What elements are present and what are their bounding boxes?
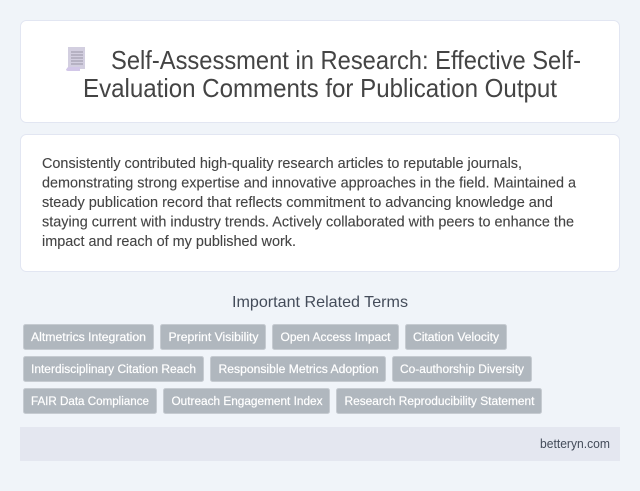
tag	[160, 324, 266, 350]
tag: Outreach Engagement Index	[172, 394, 323, 408]
tag: Citation Velocity	[413, 330, 500, 344]
panel: summary paragraph: impact and reach of my published work.	[42, 233, 296, 250]
tag: Preprint Visibility	[168, 330, 259, 344]
tag: FAIR Data Compliance	[31, 394, 149, 408]
tag	[164, 388, 330, 414]
footer bar	[20, 427, 620, 461]
tag: Open Access Impact	[280, 330, 391, 344]
icon: paper scroll	[66, 47, 85, 71]
panel: summary paragraph: steady publication record that reflects commitment to advancing knowledge and	[42, 194, 553, 211]
tag: Responsible Metrics Adoption	[218, 362, 379, 376]
tag	[210, 356, 386, 382]
tag group	[24, 324, 542, 414]
title text: Self-Assessment in Research: Effective Self-	[111, 47, 581, 75]
title text: Evaluation Comments for Publication Output	[83, 75, 557, 103]
heading: related terms: Important Related Terms	[232, 294, 408, 311]
panel: summary paragraph	[20, 134, 620, 272]
tag	[24, 324, 154, 350]
tag	[272, 324, 398, 350]
tag: Interdisciplinary Citation Reach	[31, 362, 196, 376]
panel: summary paragraph: demonstrating strong expertise and innovative approaches in the field. Maintained a	[42, 174, 577, 192]
panel: summary paragraph: staying current with industry trends. Actively collaborated with peers to enhance the	[42, 214, 574, 230]
title text	[83, 47, 581, 103]
tag	[24, 388, 156, 414]
tag	[406, 324, 506, 350]
tag	[24, 356, 204, 382]
panel: summary paragraph: Consistently contributed high-quality research articles to reputable journals,	[42, 155, 522, 172]
tag: Altmetrics Integration	[31, 330, 146, 344]
tag: Co-authorship Diversity	[400, 362, 525, 376]
tag: Research Reproducibility Statement	[344, 394, 535, 408]
footer bar: betteryn.com	[540, 437, 610, 451]
tag	[392, 356, 532, 382]
panel: title card	[20, 20, 620, 122]
tag	[336, 388, 542, 414]
